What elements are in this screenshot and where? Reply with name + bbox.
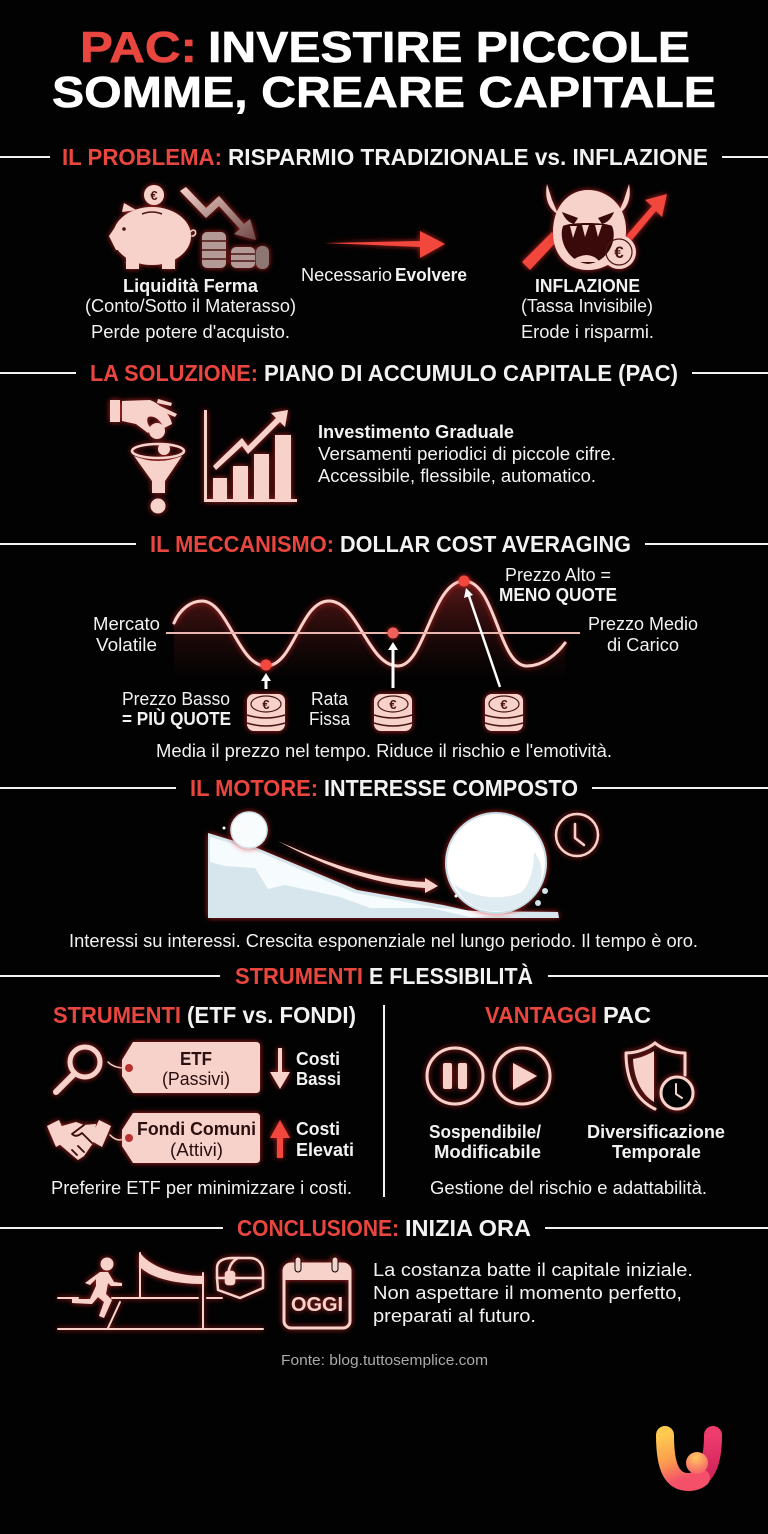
heading: vantaggi pac: PAC — [603, 1002, 651, 1028]
section heading: il motore: INTERESSE COMPOSTO — [324, 775, 578, 801]
text: liquidita ferma — [85, 276, 296, 342]
text: costi elevati: Elevati — [296, 1140, 354, 1160]
text: costi bassi — [296, 1049, 341, 1089]
text: sospendibile modificabile — [429, 1122, 541, 1162]
text: diversificazione temporale: Temporale — [612, 1142, 701, 1162]
arrow: necessario evolvere — [324, 231, 445, 258]
icon: runner crossing finish line — [58, 1253, 263, 1329]
section heading: il meccanismo: DOLLAR COST AVERAGING — [340, 531, 631, 557]
section heading: la soluzione: LA SOLUZIONE: — [90, 360, 258, 386]
text: conclusion — [373, 1260, 693, 1326]
panel: la soluzione — [110, 399, 616, 514]
arrow: costi elevati — [270, 1120, 290, 1158]
label: prezzo basso: Prezzo Basso — [122, 689, 230, 709]
icon: piggy bank with falling arrow and coins: € — [150, 188, 158, 203]
section heading: conclusione: CONCLUSIONE: — [237, 1215, 399, 1241]
tag: fondi comuni: (Attivi) — [170, 1140, 223, 1160]
text: costi elevati: Costi — [296, 1119, 340, 1139]
label: prezzo medio di carico — [588, 614, 698, 655]
text: liquidita ferma: (Conto/Sotto il Materasso) — [85, 296, 296, 316]
icon: pause — [427, 1048, 483, 1104]
text: compound interest caption: Interessi su interessi. Crescita esponenziale nel lungo periodo. Il tempo è oro. — [69, 931, 698, 951]
icon: coin stack three — [485, 694, 523, 731]
text: dca caption: Media il prezzo nel tempo. Riduce il rischio e l'emotività. — [156, 741, 612, 761]
text: investimento graduale: Versamenti periodici di piccole cifre. — [318, 444, 616, 464]
section heading: strumenti e flessibilita: STRUMENTI — [235, 963, 363, 989]
icon: shield with clock — [626, 1043, 693, 1109]
heading: strumenti etf vs fondi: (ETF vs. FONDI) — [187, 1002, 356, 1028]
illustration: snowball rolling down slope — [208, 812, 559, 918]
text: necessario evolvere: Necessario — [301, 265, 392, 285]
source: Fonte: blog.tuttosemplice.com — [281, 1353, 488, 1369]
logo — [665, 1435, 713, 1482]
heading: strumenti etf vs fondi: STRUMENTI — [53, 1002, 181, 1028]
text: inflazione: INFLAZIONE — [535, 276, 640, 296]
tag: fondi comuni: Fondi Comuni — [137, 1119, 256, 1139]
icon: coin stack one: € — [262, 697, 270, 712]
icon: handshake — [47, 1120, 125, 1160]
label: prezzo basso: = PIÙ QUOTE — [122, 708, 231, 729]
text: conclusion: La costanza batte il capitale iniziale. — [373, 1260, 693, 1280]
heading: strumenti etf vs fondi — [53, 1002, 356, 1028]
icon: coin stack two — [374, 694, 412, 731]
panel: conclusione — [58, 1253, 693, 1329]
label: mercato volatile: Volatile — [96, 635, 157, 655]
tag: fondi comuni — [122, 1113, 260, 1163]
label: prezzo alto — [499, 565, 617, 605]
label: prezzo alto: Prezzo Alto = — [505, 565, 611, 585]
text: inflazione — [521, 276, 654, 342]
section heading: strumenti e flessibilita: E FLESSIBILITÀ — [369, 962, 533, 989]
icon: coin stack two: € — [389, 697, 397, 712]
label: rata fissa: Fissa — [309, 709, 351, 729]
panel: strumenti — [47, 1002, 356, 1198]
section heading: il motore: IL MOTORE: — [190, 775, 318, 801]
text: diversificazione temporale — [587, 1122, 725, 1162]
panel: il problema — [85, 184, 667, 342]
section heading: la soluzione — [0, 360, 768, 386]
label: prezzo medio di carico: Prezzo Medio — [588, 614, 698, 634]
section heading: il problema — [0, 144, 768, 170]
section heading: il meccanismo — [0, 531, 768, 557]
icon: coin stack one — [247, 694, 285, 731]
panel: dollar cost averaging chart — [93, 565, 698, 761]
icon: play — [494, 1048, 550, 1104]
icon: clock — [556, 814, 598, 856]
text: gestione del rischio: Gestione del rischio e adattabilità. — [430, 1178, 707, 1198]
text: inflazione: (Tassa Invisibile) — [521, 296, 653, 316]
text: sospendibile modificabile: Modificabile — [434, 1142, 541, 1162]
text: costi bassi: Bassi — [296, 1069, 341, 1089]
label: rata fissa — [309, 689, 351, 729]
section heading: conclusione — [0, 1215, 768, 1241]
text: investimento graduale: Accessibile, flessibile, automatico. — [318, 466, 596, 486]
icon: calendar oggi: OGGI — [291, 1294, 343, 1316]
arrow: costi bassi — [270, 1048, 290, 1089]
icon: coin stack three: € — [500, 697, 508, 712]
text: conclusion: preparati al futuro. — [373, 1306, 536, 1326]
text: investimento graduale — [318, 422, 616, 486]
icon: inflation monster — [522, 184, 667, 270]
chart: volatile market curve — [166, 576, 580, 680]
label: prezzo alto: MENO QUOTE — [499, 585, 617, 605]
label: rata fissa: Rata — [311, 689, 349, 709]
text: sospendibile modificabile: Sospendibile/ — [429, 1122, 541, 1142]
title: PAC: — [80, 23, 197, 72]
icon: hand dropping coin in funnel — [110, 399, 184, 514]
text: liquidita ferma: Liquidità Ferma — [123, 276, 259, 296]
panel: vantaggi pac — [427, 1002, 725, 1198]
section heading: la soluzione: PIANO DI ACCUMULO CAPITALE (PAC) — [264, 360, 678, 386]
section heading: il meccanismo: IL MECCANISMO: — [150, 531, 334, 557]
icon: growth bar chart — [204, 410, 297, 502]
text: inflazione: Erode i risparmi. — [521, 322, 654, 342]
icon: treasure chest — [217, 1258, 263, 1298]
text: costi bassi: Costi — [296, 1049, 340, 1069]
text: investimento graduale: Investimento Graduale — [318, 422, 514, 442]
text: necessario evolvere: Evolvere — [395, 265, 467, 285]
icon: inflation monster: € — [614, 243, 624, 262]
arrows: purchase points — [261, 588, 500, 689]
panel: il motore — [69, 812, 698, 951]
section heading: conclusione: INIZIA ORA — [405, 1215, 531, 1241]
icon: piggy bank with falling arrow and coins — [109, 185, 269, 269]
text: preferire etf: Preferire ETF per minimizzare i costi. — [51, 1178, 352, 1198]
title: INVESTIRE PICCOLE — [208, 23, 690, 72]
icon: magnifier — [56, 1047, 125, 1092]
tag: etf — [122, 1042, 260, 1093]
tag: etf: (Passivi) — [162, 1069, 230, 1089]
title — [52, 23, 716, 117]
text: costi elevati — [296, 1119, 354, 1160]
icon: calendar oggi — [284, 1257, 350, 1328]
section heading: il motore — [0, 775, 768, 801]
label: prezzo medio di carico: di Carico — [607, 635, 679, 655]
title: SOMME, CREARE CAPITALE — [52, 68, 716, 117]
tag: etf: ETF — [180, 1049, 212, 1069]
section heading: strumenti e flessibilita — [0, 962, 768, 989]
section heading: il problema: IL PROBLEMA: — [62, 144, 222, 170]
text: necessario evolvere — [301, 265, 467, 285]
label: prezzo basso — [122, 689, 231, 729]
text: liquidita ferma: Perde potere d'acquisto. — [91, 322, 290, 342]
text: conclusion: Non aspettare il momento perfetto, — [373, 1283, 682, 1303]
text: diversificazione temporale: Diversificazione — [587, 1122, 725, 1142]
section heading: il problema: RISPARMIO TRADIZIONALE vs. INFLAZIONE — [228, 144, 708, 170]
heading: vantaggi pac: VANTAGGI — [485, 1002, 597, 1028]
label: mercato volatile: Mercato — [93, 614, 160, 634]
label: mercato volatile — [93, 614, 160, 655]
